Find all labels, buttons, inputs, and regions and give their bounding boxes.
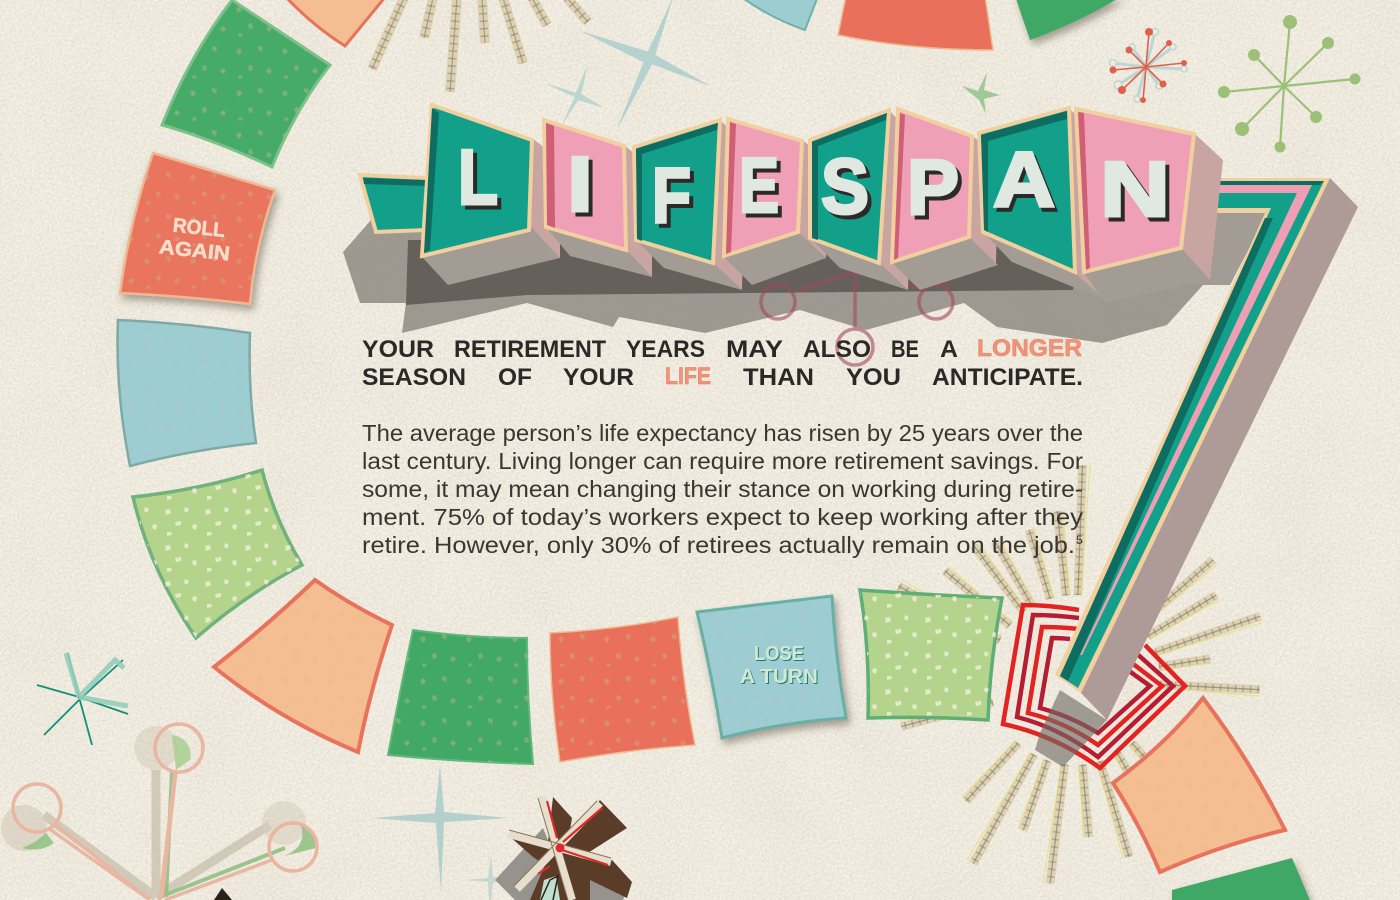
icon: brown star bottom bbox=[495, 796, 632, 900]
tile: blue top bbox=[740, 0, 818, 30]
block S bbox=[810, 110, 912, 290]
atom: large lower left bbox=[1, 724, 317, 900]
heading: THAN bbox=[743, 364, 814, 391]
block E: E bbox=[739, 141, 779, 229]
icon: small dark marker bbox=[214, 888, 232, 900]
tile: roll again bbox=[120, 153, 275, 304]
label: roll again: AGAIN bbox=[158, 236, 231, 266]
red concentric chevrons bbox=[1003, 605, 1185, 768]
seven: cream outline bbox=[1055, 178, 1330, 693]
tile: red top bbox=[838, 0, 993, 50]
tile: light green left bbox=[133, 470, 302, 638]
heading: OF bbox=[498, 364, 532, 391]
icon: teal asterisk bbox=[37, 653, 128, 745]
block P: P bbox=[911, 147, 963, 235]
block I: I bbox=[567, 140, 593, 228]
block S: S bbox=[821, 142, 869, 230]
label: lose a turn: LOSE bbox=[754, 643, 804, 665]
tile: green top bbox=[1015, 0, 1122, 40]
block A: A bbox=[993, 135, 1055, 223]
heading: RETIREMENT bbox=[454, 336, 606, 363]
block L bbox=[422, 105, 560, 285]
starburst: top bbox=[372, 0, 588, 92]
seven: side bbox=[1081, 178, 1358, 720]
block F: F bbox=[656, 155, 695, 243]
body text: some, it may mean changing their stance on working during retire- bbox=[362, 476, 1083, 502]
block E bbox=[724, 119, 826, 285]
heading bbox=[362, 335, 1083, 391]
seven: left arm bbox=[360, 175, 427, 232]
icon: pale sparkle top bbox=[547, 0, 708, 127]
block N bbox=[1076, 109, 1223, 303]
body text: retire. However, only 30% of retirees actually remain on the job. bbox=[362, 532, 1075, 558]
block F: F bbox=[652, 151, 691, 239]
block I: I bbox=[571, 144, 597, 232]
body text: 5 bbox=[1076, 533, 1083, 547]
heading: YOUR bbox=[362, 336, 434, 363]
tile: peach lower left bbox=[214, 580, 392, 752]
tile: green top left bbox=[162, 0, 330, 167]
block N: N bbox=[1104, 149, 1174, 237]
label: roll again: ROLL bbox=[172, 215, 226, 242]
label: lose a turn: A TURN bbox=[740, 666, 818, 688]
body text: ment. 75% of today’s workers expect to keep working after they bbox=[362, 504, 1084, 530]
numeral seven bbox=[360, 175, 1358, 720]
heading: YOU bbox=[846, 364, 901, 391]
body text: The average person’s life expectancy has risen by 25 years over the bbox=[362, 420, 1083, 446]
tile: green bottom bbox=[388, 630, 533, 764]
block E: E bbox=[743, 145, 783, 233]
body text bbox=[362, 420, 1084, 558]
block A bbox=[979, 108, 1105, 300]
tile: green bottom right bbox=[1172, 858, 1312, 900]
heading: ANTICIPATE. bbox=[932, 364, 1083, 391]
cast shadow of the sign bbox=[343, 212, 1268, 343]
heading: YOUR bbox=[563, 364, 634, 391]
tile: lose a turn bbox=[697, 596, 846, 738]
icon: small green star bbox=[962, 72, 1000, 114]
heading: LIFE bbox=[665, 363, 711, 390]
heading: YEARS bbox=[626, 336, 705, 363]
body text: last century. Living longer can require more retirement savings. For bbox=[362, 448, 1083, 474]
block N: N bbox=[1100, 145, 1170, 233]
icon: pale star bottom bbox=[372, 765, 509, 900]
heading: A bbox=[940, 336, 958, 363]
heading: BE bbox=[891, 336, 919, 363]
seven: teal body bbox=[1060, 181, 1324, 688]
seven: dark strips bbox=[1060, 181, 1324, 681]
block S: S bbox=[825, 146, 873, 234]
atom: green upper right bbox=[1218, 15, 1360, 152]
seven: pink stripe bbox=[1080, 185, 1312, 655]
sign: lifespan bbox=[422, 105, 1223, 303]
heading: SEASON bbox=[362, 364, 466, 391]
atom: red upper right bbox=[1110, 28, 1187, 103]
block L: L bbox=[458, 133, 498, 221]
block P bbox=[892, 109, 998, 290]
heading: MAY bbox=[726, 336, 783, 363]
label: lose a turn: A TURN bbox=[741, 667, 819, 689]
heading: ALSO bbox=[803, 336, 871, 363]
label: roll again bbox=[158, 213, 233, 266]
atom seen through shadow bbox=[761, 272, 953, 365]
starburst: lower right bbox=[891, 459, 1268, 890]
label: lose a turn bbox=[740, 643, 819, 689]
tile: peach right bbox=[1113, 698, 1285, 872]
label: lose a turn: LOSE bbox=[755, 644, 805, 666]
shadow of the seven on the chevrons bbox=[1035, 690, 1107, 767]
tile: red bottom bbox=[550, 617, 695, 762]
block A: A bbox=[996, 139, 1058, 227]
tile: blue left bbox=[118, 320, 256, 466]
tile: peach top bbox=[285, 0, 386, 46]
heading: LONGER bbox=[977, 335, 1082, 362]
block P: P bbox=[907, 143, 959, 231]
block I bbox=[544, 120, 652, 277]
block L: L bbox=[462, 137, 502, 225]
block F bbox=[634, 120, 745, 290]
tile: light green bottom bbox=[860, 590, 1002, 720]
